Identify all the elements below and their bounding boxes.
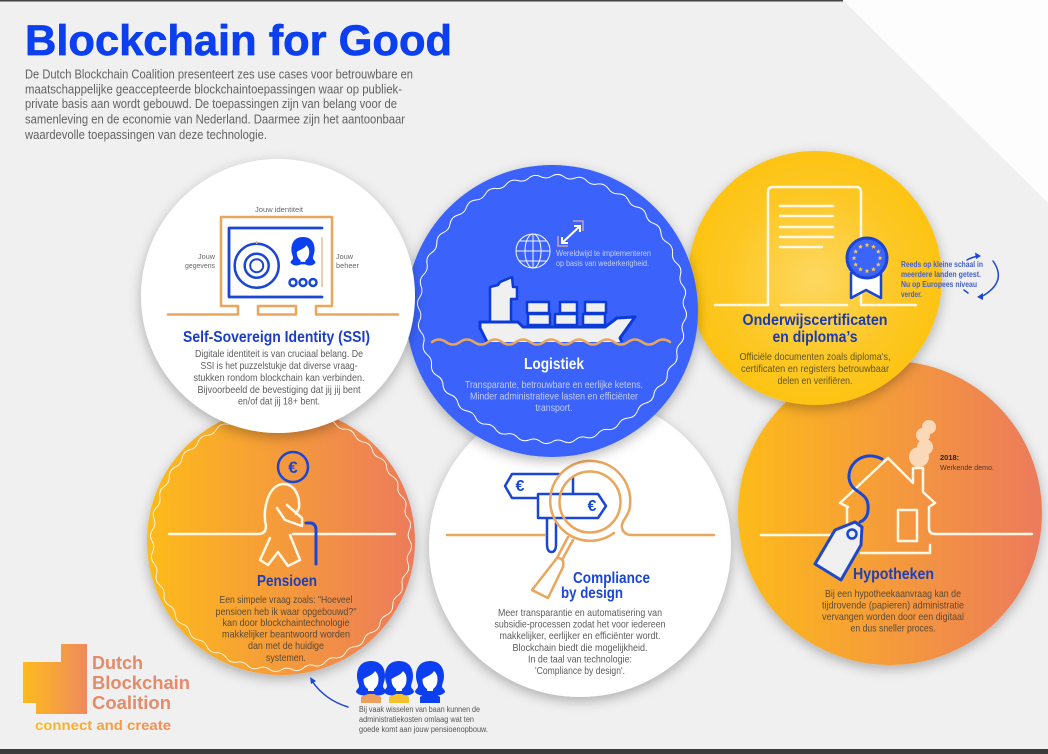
icon: certificate with EU seal	[715, 187, 916, 305]
description: Transparante, betrouwbare en eerlijke ketens.	[465, 379, 643, 391]
heading: Hypotheken	[853, 566, 934, 583]
description: pensioen heb ik waar opgebouwd?"	[216, 606, 357, 618]
panel: Hypotheken	[738, 361, 1042, 665]
description: Bij een hypotheekaanvraag kan de	[825, 588, 961, 600]
panel: Onderwijscertificaten	[688, 151, 998, 405]
description: Een simpele vraag zoals: "Hoeveel	[220, 594, 352, 606]
note: European level: verder.	[901, 290, 922, 299]
icon labels: beheer	[336, 261, 359, 270]
icon labels: gegevens	[185, 261, 215, 270]
people with pension note	[310, 661, 488, 734]
description: Minder administratieve lasten en efficiënter	[470, 390, 638, 402]
description: en/of dat jij 18+ bent.	[238, 396, 320, 408]
icon: cycle arrows	[964, 252, 998, 300]
description: transport.	[536, 402, 572, 414]
icon: signpost and magnifier	[447, 461, 714, 598]
logo: Dutch Blockchain Coalition: Dutch	[92, 653, 143, 673]
description: certificaten en registers betrouwbaar	[741, 363, 889, 375]
note: 2018 demo	[940, 453, 994, 472]
icon labels: Jouw	[336, 252, 354, 261]
icon: globe	[516, 234, 550, 268]
note: European level	[901, 260, 983, 299]
description: delen en verifiëren.	[778, 375, 852, 387]
icon: pensioner with cane: €	[288, 458, 298, 477]
top-right white corner	[843, 0, 1048, 203]
heading: Compliance	[573, 570, 650, 587]
intro text: De Dutch Blockchain Coalition presenteert zes use cases voor betrouwbare en	[25, 68, 413, 82]
panel: Pensioen	[86, 353, 445, 691]
logo: Dutch Blockchain Coalition: Coalition	[92, 693, 171, 713]
description: Officiële documenten zoals diploma's,	[740, 351, 890, 363]
heading	[742, 312, 888, 346]
caption: goede komt aan jouw pensioenopbouw.	[359, 725, 488, 734]
description	[216, 594, 357, 664]
description	[194, 348, 364, 408]
title: Blockchain for Good	[25, 17, 452, 65]
icon labels: Jouw	[198, 252, 216, 261]
description: vervangen worden door een digitaal	[822, 611, 964, 623]
top edge bar	[0, 0, 843, 2]
wavy ring	[351, 115, 721, 464]
description: tijdrovende (papieren) administratie	[822, 600, 964, 612]
heading: Logistiek	[524, 356, 584, 373]
heading: by design	[561, 585, 623, 602]
description: Digitale identiteit is van cruciaal belang. De	[195, 348, 363, 360]
description	[494, 607, 666, 677]
description: 'Compliance by design'.	[535, 665, 625, 677]
logo: Dutch Blockchain Coalition: Blockchain	[92, 673, 190, 693]
caption	[359, 705, 488, 734]
description: makkelijker, eerlijker en efficiënter wordt.	[500, 630, 660, 642]
icon: signpost and magnifier: €	[516, 478, 525, 495]
description: kan door blockchaintechnologie	[222, 617, 350, 629]
note: 2018 demo: Werkende demo.	[940, 463, 994, 472]
icon: pensioner with cane	[169, 452, 395, 566]
icon: container ship	[480, 277, 635, 342]
logo: Dutch Blockchain Coalition: connect and create	[35, 717, 171, 733]
heading: en diploma’s	[772, 329, 858, 346]
description: dan met de huidige	[248, 640, 324, 652]
icon labels	[185, 205, 359, 270]
wave line	[432, 340, 670, 344]
note: European level: Reeds op kleine schaal in	[901, 260, 983, 269]
icon: signpost and magnifier: €	[588, 498, 597, 515]
logo: Dutch Blockchain Coalition	[23, 644, 190, 733]
icon: scale arrow	[558, 221, 583, 246]
heading	[561, 570, 650, 602]
note: European level: meerdere landen getest.	[901, 270, 981, 279]
intro text: samenleving en de economie van Nederland. Daarmee zijn het aantoonbaar	[25, 112, 405, 126]
heading: Onderwijscertificaten	[742, 312, 888, 329]
description	[465, 379, 643, 414]
panel: Compliance by design	[429, 395, 731, 697]
description: Meer transparantie en automatisering van	[498, 607, 662, 619]
note: 2018 demo: 2018:	[940, 453, 959, 462]
description: In de taal van technologie:	[528, 654, 632, 666]
intro text: private basis aan wordt gebouwd. De toepassingen zijn van belang voor de	[25, 97, 397, 111]
icon: three people	[356, 661, 445, 703]
description: makkelijker beantwoord worden	[222, 628, 350, 640]
description: systemen.	[266, 652, 306, 664]
intro text	[24, 68, 413, 142]
bottom edge bar	[0, 749, 1048, 754]
icon: house with price tag	[761, 420, 1032, 580]
intro text: waardevolle toepassingen van deze technologie.	[24, 128, 267, 142]
heading: Pensioen	[257, 573, 317, 590]
note: worldwide: op basis van wederkerigheid.	[556, 259, 649, 268]
description: Bijvoorbeeld de bevestiging dat jij jij bent	[198, 384, 361, 396]
intro text: maatschappelijke geaccepteerde blockchaintoepassingen waar op publiek-	[25, 82, 402, 96]
panel: Self-Sovereign Identity	[141, 159, 415, 433]
note: worldwide: Wereldwijd te implementeren	[556, 249, 651, 258]
description	[822, 588, 964, 634]
description: stukken rondom blockchain kan verbinden.	[194, 372, 364, 384]
arrow to pension panel	[310, 677, 348, 707]
icon: identity vault	[168, 217, 398, 314]
description: Blockchain biedt die mogelijkheid.	[512, 642, 648, 654]
wavy ring	[86, 353, 445, 691]
description	[740, 351, 890, 387]
icon labels: Jouw identiteit	[255, 205, 304, 214]
description: en dus sneller proces.	[850, 622, 936, 634]
note: European level: Nu op Europees niveau	[901, 280, 977, 289]
note: worldwide	[556, 249, 651, 268]
description: SSI is het puzzelstukje dat diverse vraag-	[200, 360, 358, 372]
panel: Logistiek	[351, 115, 721, 464]
caption: administratiekosten omlaag wat ten	[359, 715, 474, 724]
description: subsidie-processen zodat het voor iedereen	[494, 618, 666, 630]
heading: Self-Sovereign Identity (SSI)	[183, 329, 370, 346]
caption: Bij vaak wisselen van baan kunnen de	[359, 705, 480, 714]
